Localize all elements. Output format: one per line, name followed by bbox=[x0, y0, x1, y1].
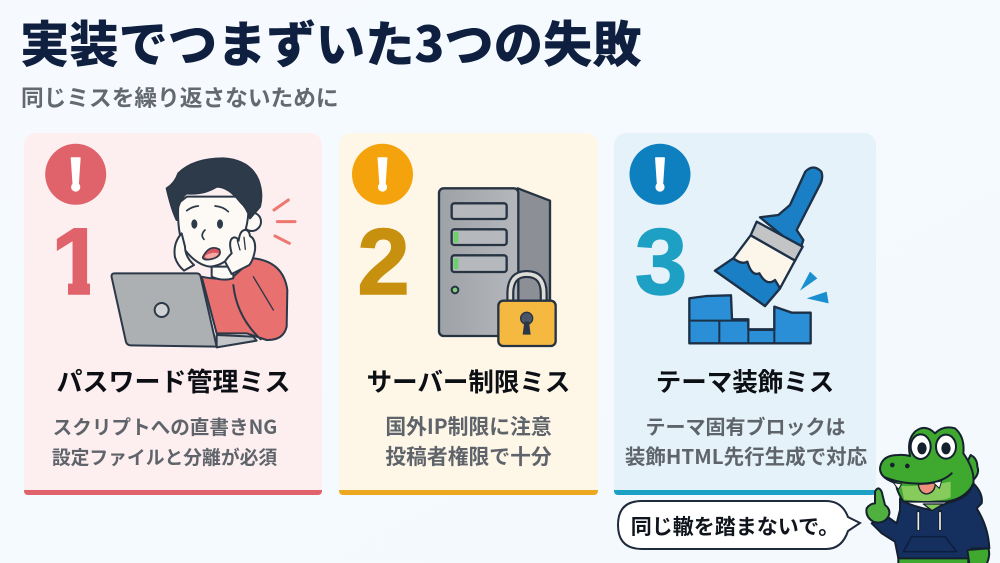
laptop and shock lines bbox=[112, 200, 295, 347]
card description: 投稿者権限で十分 bbox=[385, 440, 552, 470]
panel: card 1 password mistake bbox=[24, 133, 322, 495]
title: 実装でつまずいた3つの失敗 bbox=[20, 6, 642, 77]
card heading: テーマ装飾ミス bbox=[656, 362, 834, 399]
callout: speech bubble: 同じ轍を踏まないで。 bbox=[631, 511, 839, 541]
card heading: パスワード管理ミス bbox=[56, 362, 291, 399]
number 1: 1 bbox=[51, 209, 104, 315]
card description: 国外IP制限に注意 bbox=[385, 410, 552, 440]
card accent bar bbox=[614, 490, 876, 495]
card heading: サーバー制限ミス bbox=[367, 362, 570, 399]
card background bbox=[339, 133, 598, 495]
card accent bar bbox=[24, 490, 322, 495]
card description: 装飾HTML先行生成で対応 bbox=[625, 440, 868, 470]
card description: テーマ固有ブロックは bbox=[646, 411, 846, 440]
number 2: 2 bbox=[357, 209, 410, 314]
man's worried face bbox=[167, 158, 261, 274]
illustration: worried man at laptop bbox=[112, 158, 295, 347]
mascot: crocodile in hoodie bbox=[866, 427, 989, 563]
card description bbox=[52, 411, 277, 470]
illustration: server with padlock bbox=[439, 188, 556, 346]
card background bbox=[614, 133, 876, 495]
card accent bar bbox=[339, 490, 598, 495]
icon: alert badge bbox=[630, 144, 690, 205]
panel: card 3 theme decoration mistake bbox=[614, 133, 876, 495]
card description: 設定ファイルと分離が必須 bbox=[52, 443, 277, 470]
card description bbox=[625, 411, 868, 470]
illustration: paint brush and broken blocks bbox=[689, 167, 829, 343]
icon: alert badge bbox=[45, 144, 106, 205]
card description bbox=[385, 410, 552, 470]
card description: スクリプトへの直書きNG bbox=[53, 411, 277, 440]
man's sweater bbox=[202, 258, 287, 340]
number 3: 3 bbox=[635, 209, 687, 314]
subtitle: 同じミスを繰り返さないために bbox=[21, 80, 339, 113]
panel: card 2 server restriction mistake bbox=[339, 133, 598, 495]
card background bbox=[24, 133, 322, 495]
callout: speech bubble bbox=[618, 501, 860, 549]
icon: alert badge bbox=[352, 144, 413, 205]
